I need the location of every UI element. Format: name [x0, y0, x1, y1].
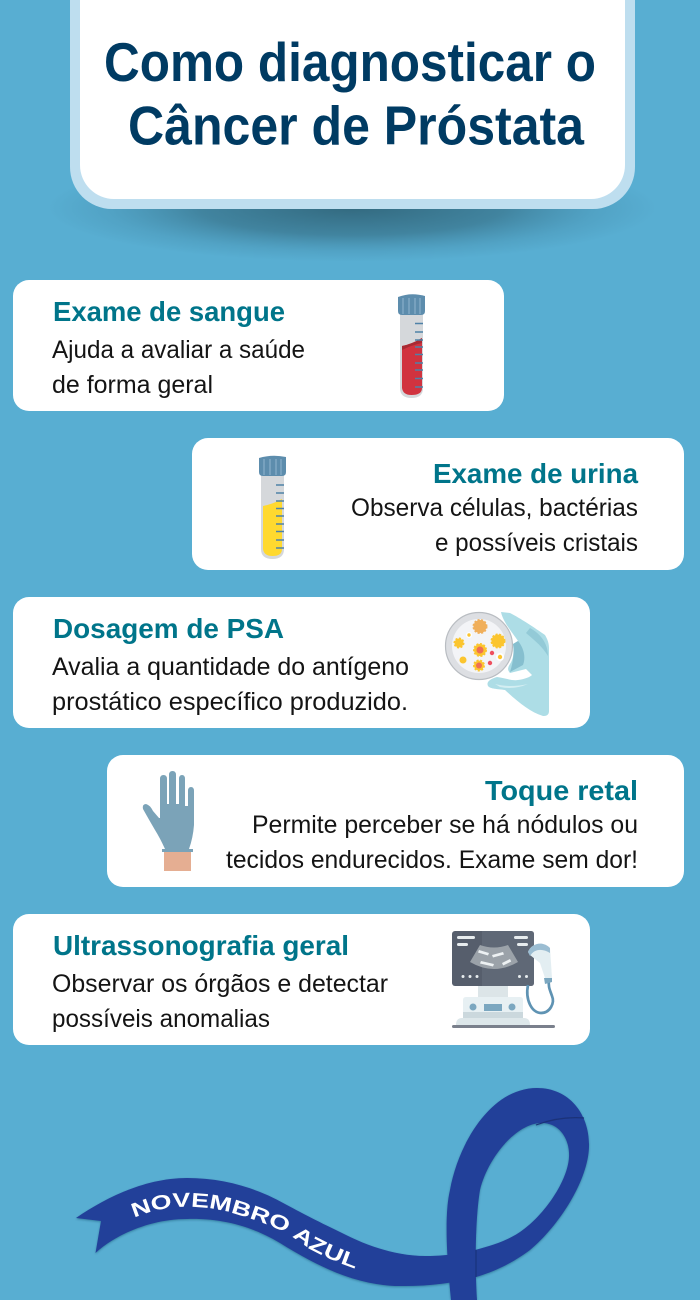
text: dosagem de PSA [52, 653, 409, 716]
icon: ultrasound machine [452, 931, 555, 1028]
icon: blood test tube [398, 294, 425, 398]
panel: ultrassonografia geral [13, 914, 590, 1045]
text: exame de urina [351, 494, 638, 557]
text: toque retal: Permite perceber se há nódulos ou [252, 811, 638, 839]
ribbon label: NOVEMBRO AZUL [131, 1192, 356, 1268]
panel: dosagem de PSA [13, 597, 590, 728]
text: exame de sangue: de forma geral [52, 371, 213, 399]
icon: petri dish and glove [446, 612, 549, 716]
title shadow [47, 154, 657, 262]
text: exame de urina: Observa células, bactérias [351, 494, 638, 522]
title text: Como diagnosticar o [104, 31, 596, 93]
text: exame de urina: e possíveis cristais [435, 529, 638, 557]
text: ultrassonografia geral: Observar os órgãos e detectar [52, 970, 388, 998]
heading: toque retal: Toque retal [485, 775, 638, 806]
panel: exame de sangue [13, 280, 504, 411]
heading: exame de sangue: Exame de sangue [53, 296, 285, 327]
panel: toque retal [107, 755, 684, 887]
icon: urine test tube [259, 456, 286, 559]
text: dosagem de PSA: Avalia a quantidade do antígeno [52, 653, 409, 681]
text: ultrassonografia geral [52, 970, 388, 1033]
title panel [70, 0, 635, 209]
awareness ribbon [76, 1088, 589, 1300]
heading: dosagem de PSA: Dosagem de PSA [53, 613, 284, 644]
text: dosagem de PSA: prostático específico produzido. [52, 688, 408, 716]
text: toque retal [226, 811, 638, 874]
text: exame de sangue [52, 336, 305, 399]
heading: ultrassonografia geral: Ultrassonografia geral [53, 930, 349, 961]
icon: gloved hand [143, 771, 194, 871]
text: exame de sangue: Ajuda a avaliar a saúde [52, 336, 305, 364]
panel: exame de urina [192, 438, 684, 570]
title text [104, 31, 596, 156]
heading: exame de urina: Exame de urina [433, 458, 638, 489]
title text: Câncer de Próstata [128, 94, 584, 156]
text: toque retal: tecidos endurecidos. Exame sem dor! [226, 846, 638, 874]
text: ultrassonografia geral: possíveis anomalias [52, 1005, 270, 1033]
